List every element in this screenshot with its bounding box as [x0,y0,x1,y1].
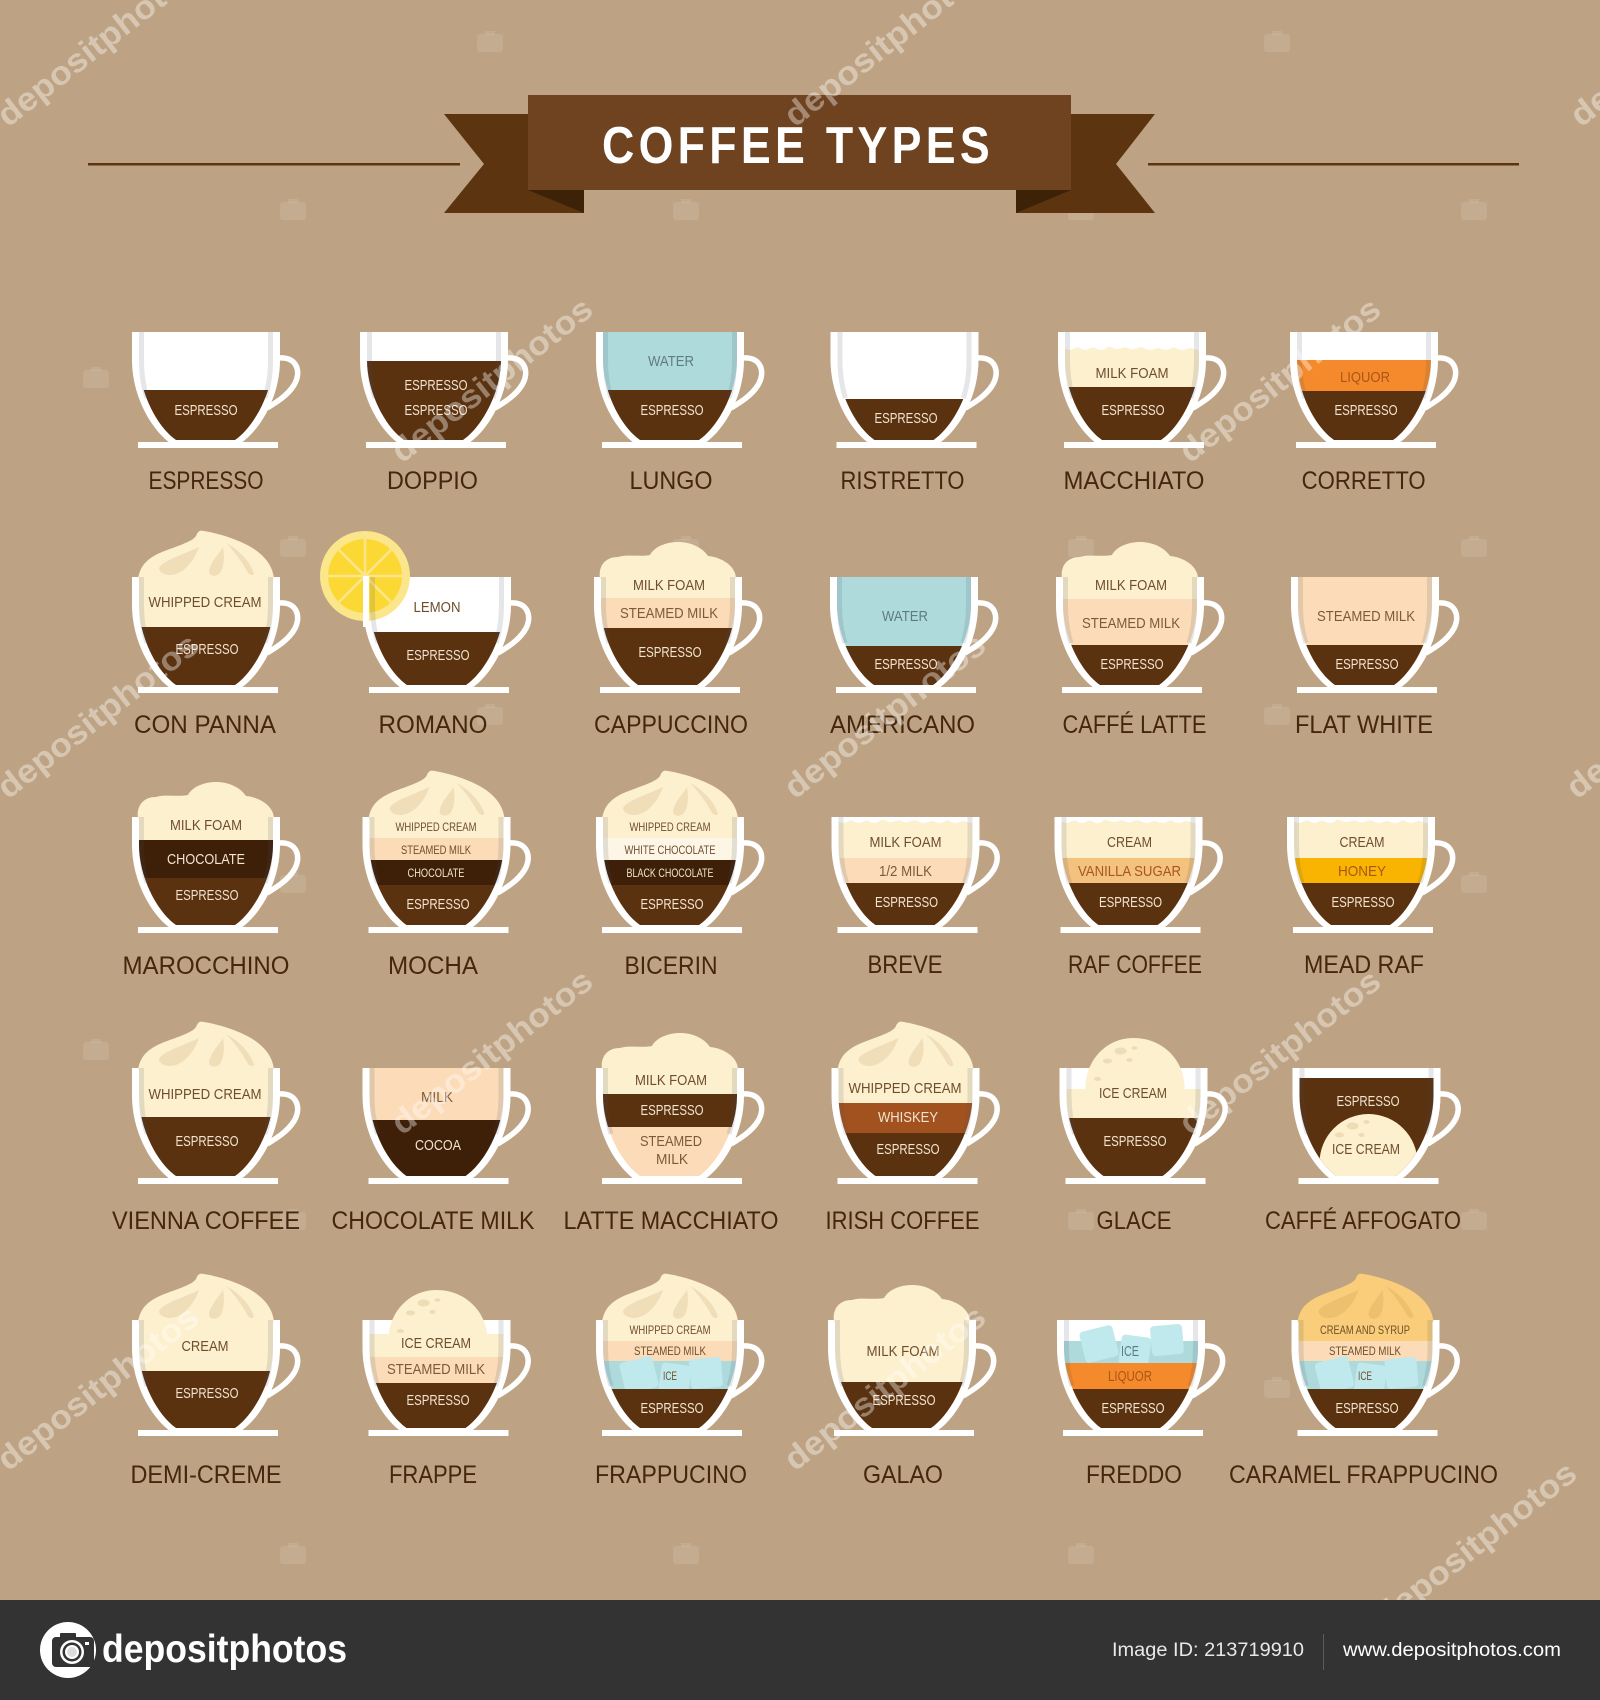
watermark text overlay: depositphotos [1172,290,1387,470]
cup: frappucino: WHIPPED CREAM [630,1323,710,1337]
panel: Con Panna [132,531,298,739]
cup: irish coffee: WHISKEY [878,1109,938,1126]
name: Vienna Coffee: VIENNA COFFEE [112,1207,300,1235]
cup: latte macchiato: MILK [656,1151,688,1168]
cup: espresso [132,332,298,450]
cup: breve: MILK FOAM [870,834,942,851]
panel: Americano [830,577,996,739]
cup: freddo [1057,1320,1223,1438]
cup: latte macchiato: ESPRESSO [640,1102,704,1119]
name: Demi-Creme: DEMI-CREME [130,1461,282,1489]
header line left [88,163,460,166]
cup: caramel frappucino: CREAM AND SYRUP [1320,1323,1410,1337]
cup: con panna: ESPRESSO [176,641,238,658]
panel: Bicerin [596,771,762,980]
cup: demi-creme [132,1274,298,1438]
cup: frappucino: ICE [663,1369,677,1383]
cup: irish coffee: ESPRESSO [876,1141,940,1158]
name: Galao: GALAO [863,1461,943,1489]
cup: breve: ESPRESSO [875,894,938,911]
cup: frappe: STEAMED MILK [387,1361,485,1378]
cup: caffé affogato: ICE CREAM [1332,1141,1400,1158]
name: Breve: BREVE [868,951,942,979]
cup: doppio [360,332,526,451]
name: Caramel Frappucino: CARAMEL FRAPPUCINO [1229,1461,1498,1489]
panel: Irish Coffee [826,1022,997,1235]
cup: lungo [596,332,762,450]
name: Raf Coffee: RAF COFFEE [1068,951,1202,979]
cup: marocchino [132,782,298,935]
cup: frappucino [596,1274,762,1438]
cup: caffé latte: MILK FOAM [1095,577,1167,594]
cup: breve: 1/2 MILK [879,863,932,880]
cup: vienna coffee: ESPRESSO [176,1133,238,1150]
cup: con panna: WHIPPED CREAM [148,594,262,611]
cup: raf coffee [1054,817,1220,935]
cup: doppio: ESPRESSO [404,377,468,394]
cup: macchiato [1058,332,1224,450]
cup: frappe [362,1290,528,1438]
panel: Marocchino [122,782,298,980]
cup: flat white: ESPRESSO [1336,656,1398,673]
panel: Caffé Affogato [1265,1068,1461,1235]
cup: ristretto: ESPRESSO [874,410,938,427]
cup: americano [830,577,996,696]
watermark text overlay: depositphotos [1172,962,1387,1142]
cup: marocchino: CHOCOLATE [167,851,245,868]
cup: bicerin: ESPRESSO [640,896,704,913]
panel: Caffé Latte [1056,542,1222,739]
name: Caffé Affogato: CAFFÉ AFFOGATO [1265,1206,1461,1235]
panel: Cappuccino [594,542,760,739]
cup: galao [828,1285,994,1438]
cup: latte macchiato: STEAMED [640,1133,702,1150]
watermark text overlay: depositphotos [777,1298,992,1478]
title: COFFEE TYPES [602,117,994,175]
header line right [1148,163,1519,166]
cup: caramel frappucino: ESPRESSO [1336,1400,1398,1417]
panel: Freddo [1057,1320,1223,1489]
panel: Corretto [1290,332,1456,495]
name: Frappucino: FRAPPUCINO [595,1461,747,1489]
panel: Espresso [132,332,298,495]
cup: caffé affogato [1292,1068,1458,1212]
icon: lemon slice [320,531,410,621]
cup: cappuccino: STEAMED MILK [620,605,718,622]
cup: caffé latte: STEAMED MILK [1082,615,1180,632]
cup: caramel frappucino [1292,1274,1457,1438]
cup: caffé affogato: ESPRESSO [1336,1093,1400,1110]
name: Chocolate Milk: CHOCOLATE MILK [332,1207,535,1235]
name: Cappuccino: CAPPUCCINO [594,711,748,739]
cup: doppio: ESPRESSO [404,402,468,419]
cup: cappuccino: ESPRESSO [638,644,702,661]
cup: marocchino: MILK FOAM [170,817,242,834]
panel: Ristretto [830,332,996,495]
cup: raf coffee: ESPRESSO [1099,894,1162,911]
footer divider [1323,1634,1324,1670]
cup: bicerin: BLACK CHOCOLATE [626,866,714,880]
cup: mocha: CHOCOLATE [408,866,464,880]
name: Romano: ROMANO [378,711,488,739]
cup: mead raf [1287,817,1453,935]
name: Corretto: CORRETTO [1302,467,1426,495]
cup: galao: ESPRESSO [872,1392,936,1409]
panel: Vienna Coffee [112,1022,300,1235]
cup: mead raf: CREAM [1340,834,1384,851]
panel: Frappucino [595,1274,762,1489]
panel: Flat White [1291,577,1457,739]
cup: frappe: ESPRESSO [406,1392,470,1409]
cup: bicerin [596,771,762,935]
name: Doppio: DOPPIO [387,467,478,495]
cup: bicerin: WHITE CHOCOLATE [624,843,716,857]
cup: romano [320,531,529,696]
cup: macchiato: ESPRESSO [1102,402,1164,419]
cup: chocolate milk [362,1068,528,1186]
cup: corretto: ESPRESSO [1334,402,1398,419]
cup: frappucino: ESPRESSO [640,1400,704,1417]
cup: glace: ESPRESSO [1104,1133,1166,1150]
cup: flat white [1291,577,1457,695]
panel: Mocha [362,771,528,980]
cup: galao: MILK FOAM [866,1343,940,1360]
cup: freddo: LIQUOR [1108,1368,1152,1385]
cup: caramel frappucino: STEAMED MILK [1329,1344,1401,1358]
image id: Image ID: 213719910 [1112,1640,1304,1661]
panel: Frappe [362,1290,528,1489]
cup: con panna [132,531,298,695]
cup: americano: WATER [882,608,928,625]
panel: Romano [320,531,529,739]
cup: caffé latte [1056,542,1222,695]
panel: Mead Raf [1287,817,1453,979]
cup: lungo: WATER [648,353,694,370]
name: Bicerin: BICERIN [624,952,718,980]
watermark text overlay: depositphotos [777,626,992,806]
name: Espresso: ESPRESSO [148,467,264,495]
cup: freddo: ESPRESSO [1102,1400,1164,1417]
name: Marocchino: MAROCCHINO [122,952,290,980]
cup: irish coffee [832,1022,997,1186]
cup: cappuccino [594,542,760,696]
cup: mocha [362,771,528,935]
footer bar [0,1600,1600,1700]
panel: Demi-Creme [130,1274,298,1489]
cup: lungo: ESPRESSO [640,402,704,419]
cup: cappuccino: MILK FOAM [633,577,705,594]
cup: vienna coffee: WHIPPED CREAM [148,1086,262,1103]
cup: americano: ESPRESSO [874,656,938,673]
name: Freddo: FREDDO [1086,1461,1182,1489]
footer brand: depositphotos [102,1628,347,1671]
name: Mocha: MOCHA [388,952,478,980]
cup: chocolate milk: COCOA [415,1137,461,1154]
title ribbon [444,95,1155,213]
cup: latte macchiato: MILK FOAM [635,1072,707,1089]
cup: latte macchiato [596,1033,762,1186]
cup: corretto: LIQUOR [1340,369,1390,386]
name: Ristretto: RISTRETTO [840,467,964,495]
name: Lungo: LUNGO [630,467,712,495]
name: Frappe: FRAPPE [389,1461,477,1489]
cup: caffé latte: ESPRESSO [1100,656,1164,673]
name: Irish Coffee: IRISH COFFEE [826,1207,980,1235]
panel: Doppio [360,332,526,495]
cup: chocolate milk: MILK [421,1089,453,1106]
cup: flat white: STEAMED MILK [1317,608,1415,625]
panel: Chocolate Milk [332,1068,535,1235]
watermark text overlay: depositphotos [384,962,599,1142]
cup: glace [1060,1038,1225,1186]
name: Americano: AMERICANO [830,711,975,739]
cup: mocha: WHIPPED CREAM [396,820,476,834]
panel: Caramel Frappucino [1229,1274,1498,1489]
panel: Raf Coffee [1054,817,1220,979]
name: Con Panna: CON PANNA [134,711,276,739]
cup: mead raf: HONEY [1338,863,1386,880]
panel: Macchiato [1058,332,1224,495]
footer url: www.depositphotos.com [1342,1640,1561,1661]
name: Mead Raf: MEAD RAF [1304,951,1424,979]
cup: glace: ICE CREAM [1099,1085,1167,1102]
cup: mocha: STEAMED MILK [401,843,471,857]
cup: irish coffee: WHIPPED CREAM [848,1080,962,1097]
cup: romano: LEMON [414,599,460,616]
name: Latte Macchiato: LATTE MACCHIATO [564,1207,778,1235]
cup: raf coffee: CREAM [1107,834,1152,851]
cup: macchiato: MILK FOAM [1096,365,1168,382]
cup: marocchino: ESPRESSO [176,887,238,904]
cup: frappe: ICE CREAM [401,1335,471,1352]
cup: frappucino: STEAMED MILK [634,1344,706,1358]
panel: Glace [1060,1038,1225,1235]
panel: Latte Macchiato [564,1033,778,1235]
cup: freddo: ICE [1121,1343,1139,1360]
name: Macchiato: MACCHIATO [1064,467,1204,495]
name: Glace: GLACE [1096,1207,1172,1235]
panel: Lungo [596,332,762,495]
cup: caramel frappucino: ICE [1358,1369,1372,1383]
panel: Galao [828,1285,994,1489]
cup: demi-creme: ESPRESSO [176,1385,238,1402]
cup: raf coffee: VANILLA SUGAR [1078,863,1181,880]
cup: ristretto [830,332,996,449]
panel: Breve [832,817,997,979]
cup: espresso: ESPRESSO [174,402,238,419]
cup: breve [832,817,997,935]
cup: mead raf: ESPRESSO [1332,894,1394,911]
watermark text overlay: depositphotos [1368,1454,1583,1634]
cup: vienna coffee [132,1022,298,1186]
name: Flat White: FLAT WHITE [1295,711,1433,739]
cup: romano: ESPRESSO [406,647,470,664]
watermark camera marks [83,31,1487,1564]
icon: footer camera logo [40,1622,96,1678]
cup: mocha: ESPRESSO [406,896,470,913]
cup: bicerin: WHIPPED CREAM [630,820,710,834]
name: Caffé Latte: CAFFÉ LATTE [1062,710,1206,739]
cup: demi-creme: CREAM [182,1338,228,1355]
cup: corretto [1290,332,1456,451]
watermark text overlay: depositphotos [384,290,599,470]
